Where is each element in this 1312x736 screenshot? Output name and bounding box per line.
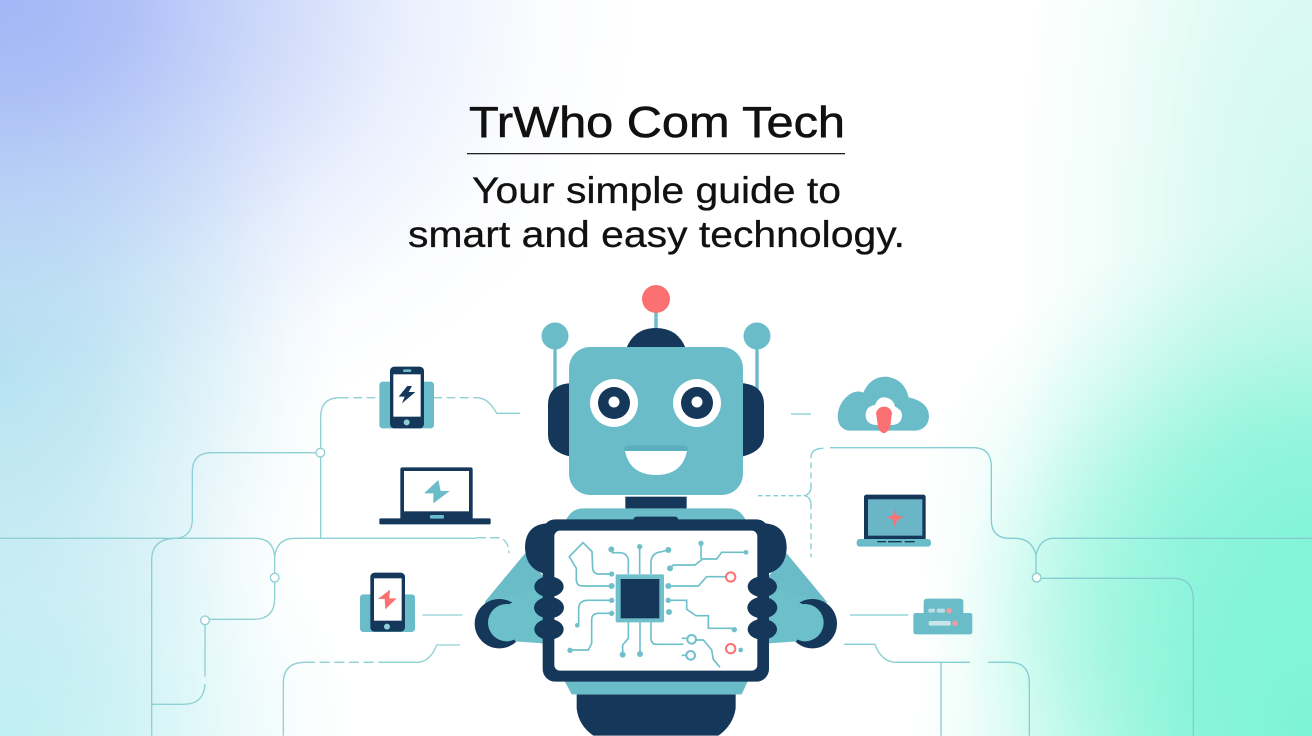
dashed right connector (758, 414, 823, 557)
icon: laptop with teal bolt (379, 467, 491, 524)
title: TrWho Com Tech (469, 98, 845, 147)
icon: phone with red bolt (360, 573, 415, 632)
shoulders (566, 508, 746, 520)
icon: laptop with red star (857, 495, 931, 547)
left arm (475, 523, 557, 648)
neck (625, 497, 687, 512)
torso teal band (564, 680, 748, 694)
head dome (626, 328, 686, 349)
title rule (467, 153, 845, 154)
subtitle (408, 170, 905, 255)
subtitle: Your simple guide to (472, 170, 841, 211)
icon: server (913, 599, 972, 634)
tablet screen (554, 531, 757, 671)
subtitle: smart and easy technology. (408, 214, 905, 255)
face (569, 347, 743, 495)
right circuit lines (830, 448, 1312, 736)
robot body (475, 497, 837, 736)
microchip (616, 574, 664, 622)
antennas (542, 285, 770, 392)
eyes (590, 379, 721, 427)
circuit traces (569, 543, 746, 667)
robot head (542, 285, 770, 495)
left circuit lines (0, 417, 477, 736)
mouth (624, 446, 688, 475)
lower torso (577, 694, 736, 736)
tablet frame (543, 519, 769, 682)
circuit rings (686, 572, 735, 660)
right arm (755, 523, 837, 648)
fingers (534, 576, 777, 640)
icon: phone with dark bolt (379, 367, 434, 428)
icon: cloud with shield (838, 377, 929, 433)
upper left circuit lines (321, 398, 520, 615)
circuit nodes (567, 541, 748, 658)
ears (548, 383, 764, 457)
